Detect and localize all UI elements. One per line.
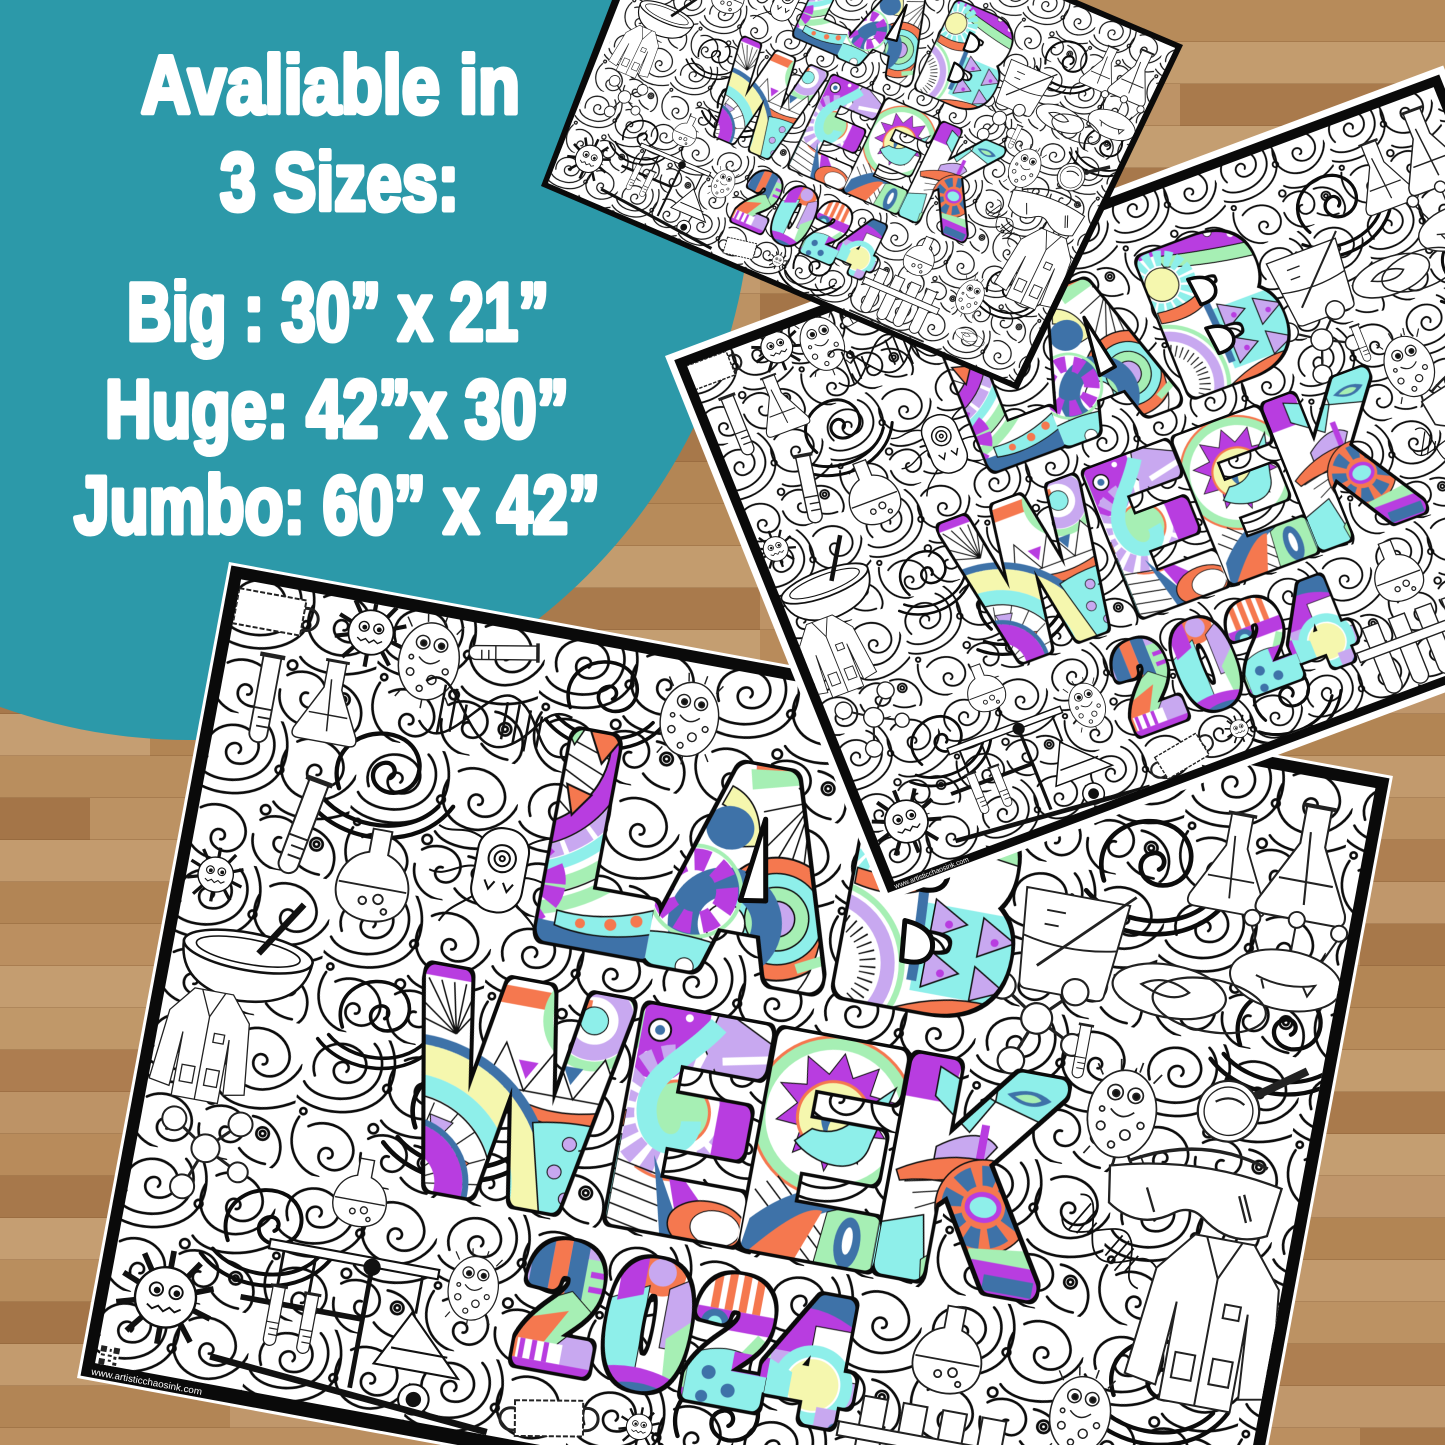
poster black border xyxy=(81,565,1389,1445)
word: 2024 xyxy=(729,169,888,281)
QR code xyxy=(98,1345,120,1367)
poster contents xyxy=(548,0,1175,382)
word: 2024: 4 xyxy=(1265,556,1367,696)
scaled art and lettering xyxy=(541,0,1189,393)
word: LAB: L xyxy=(922,277,1077,502)
word: LAB xyxy=(922,189,1312,504)
doodle line art xyxy=(77,562,1407,1445)
colored lettering: LAB WEEK 2024 xyxy=(712,0,1014,281)
poster paper xyxy=(548,0,1175,382)
word: WEEK xyxy=(928,331,1437,704)
heading line 2: 3 Sizes: xyxy=(220,137,459,228)
word: 2024: 4 xyxy=(826,201,895,292)
letter counters xyxy=(1077,271,1239,395)
word: 2024: 0 xyxy=(593,1227,704,1422)
word: WEEK: E xyxy=(723,976,923,1323)
website url: www.artisticchaosink.com xyxy=(89,1367,203,1398)
word: WEEK: E xyxy=(830,76,952,236)
word: LAB: A xyxy=(1001,237,1190,475)
word: LAB xyxy=(532,726,1022,1018)
poster paper edge xyxy=(665,65,1445,902)
poster paper edge xyxy=(77,562,1393,1445)
word: 2024: 2 xyxy=(1213,574,1311,713)
word: WEEK xyxy=(712,35,1007,244)
word: WEEK: K xyxy=(885,99,1016,264)
word: 2024: 2 xyxy=(678,1244,785,1438)
word: 2024: 2 xyxy=(1099,615,1195,754)
poster: large front poster xyxy=(77,562,1407,1445)
word: WEEK: W xyxy=(928,441,1143,704)
poster black border xyxy=(674,74,1445,893)
word: LAB: L xyxy=(524,686,693,1002)
word: WEEK xyxy=(420,960,1072,1305)
word: WEEK: W xyxy=(691,17,835,186)
doodle line art xyxy=(665,62,1445,902)
letters with outline xyxy=(420,726,1072,1432)
size: big: Big : 30” x 21” xyxy=(127,267,549,358)
doodle line art xyxy=(541,0,1189,393)
word: WEEK: E xyxy=(1064,404,1243,654)
word: WEEK: E xyxy=(775,52,897,213)
poster: medium middle poster xyxy=(665,62,1445,902)
word: WEEK: K xyxy=(857,1001,1078,1351)
word: 2024: 2 xyxy=(508,1210,614,1403)
word: LAB: A xyxy=(640,711,860,1036)
word: WEEK: W xyxy=(385,914,639,1271)
heading and sizes text block xyxy=(74,40,600,551)
word: LAB xyxy=(792,0,1014,110)
word: 2024 xyxy=(508,1236,860,1432)
word: LAB: B xyxy=(822,742,1042,1067)
word: 2024 xyxy=(1099,552,1367,758)
word: LAB: B xyxy=(1122,190,1311,428)
word: 2024: 2 xyxy=(726,156,792,245)
letters with outline xyxy=(863,169,1445,794)
word: 2024: 0 xyxy=(1156,594,1256,734)
word: WEEK: E xyxy=(1154,370,1333,620)
colored lettering: LAB WEEK 2024 xyxy=(420,726,1072,1432)
poster black border xyxy=(541,0,1183,390)
heading line 1: Avaliable in xyxy=(141,40,520,131)
website url: www.artisticchaosink.com xyxy=(893,856,970,891)
size: huge: Huge: 42”x 30” xyxy=(105,364,569,455)
letters with outline xyxy=(712,0,1014,281)
word: 2024: 2 xyxy=(795,187,862,276)
large poster contents xyxy=(77,562,1407,1445)
word: WEEK: E xyxy=(589,952,788,1298)
letter counters xyxy=(735,817,952,966)
word: 2024: 0 xyxy=(760,171,829,261)
poster: small top poster xyxy=(541,0,1183,390)
letter counters xyxy=(880,3,983,85)
teal circle panel xyxy=(0,0,752,740)
colored lettering: LAB WEEK 2024 xyxy=(863,169,1445,794)
size: jumbo: Jumbo: 60” x 42” xyxy=(74,460,600,551)
